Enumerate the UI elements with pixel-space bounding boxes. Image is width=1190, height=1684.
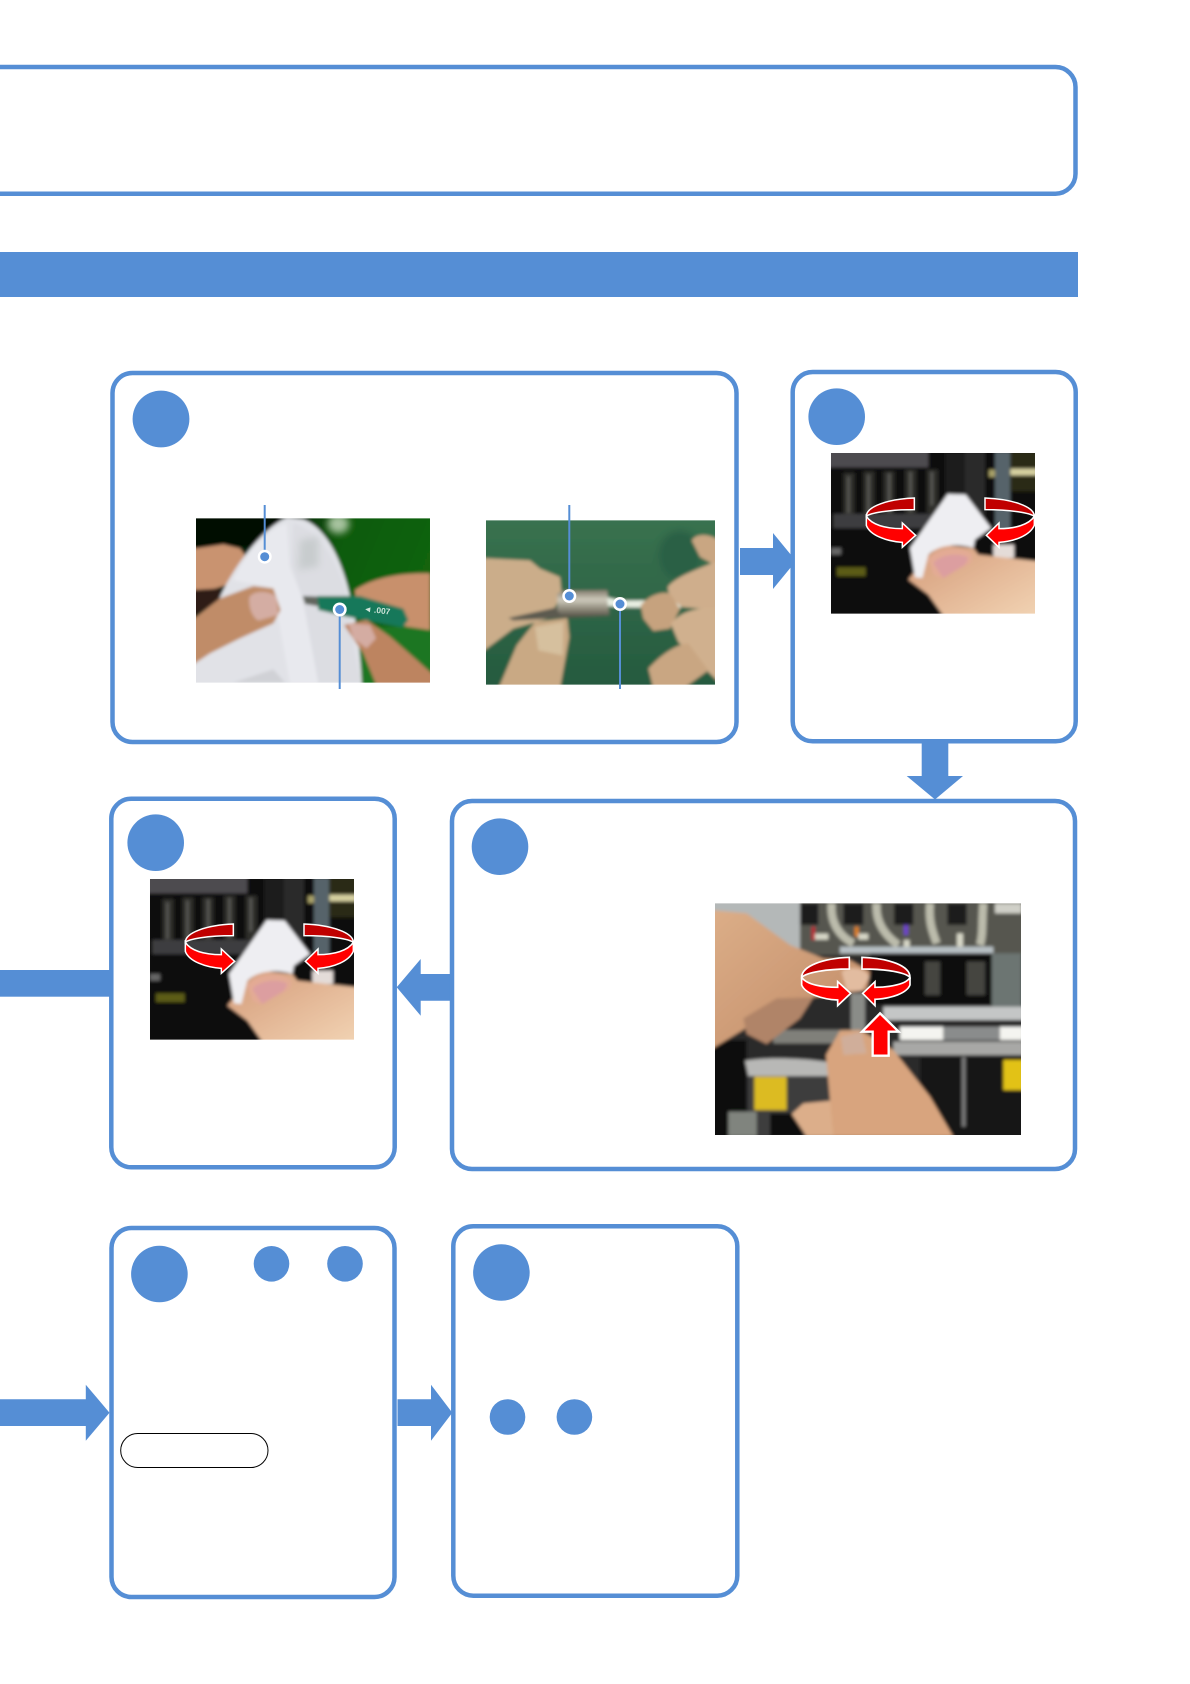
push-up arrow <box>862 1013 899 1056</box>
curl arrow: right <box>985 498 1034 547</box>
callout: tool line and dot <box>333 602 347 689</box>
section heading bar <box>0 252 1078 297</box>
photo: wiping nozzle with cloth <box>831 453 1035 614</box>
step 5 number badge <box>131 1246 188 1302</box>
photo: wiping nozzle with cloth <box>150 879 354 1040</box>
panel: step 1 <box>112 373 736 742</box>
photo: inserting tool into machine <box>710 900 1027 1140</box>
panel: step 3 <box>111 799 395 1167</box>
arrow: into step 5 <box>0 1385 110 1441</box>
panel: step 4 <box>452 801 1075 1169</box>
tool label text: ◄ .007 <box>363 603 391 617</box>
note pill outline <box>121 1434 268 1468</box>
arrow: step 3 to step 4 <box>397 959 452 1016</box>
curl arrow: left <box>185 924 235 973</box>
panel: step 6 <box>453 1226 737 1596</box>
reference badge A <box>254 1246 289 1282</box>
curl arrow: right <box>862 957 910 1006</box>
curl arrow: right <box>304 924 353 973</box>
arrow: step 1 to step 2 <box>740 533 796 589</box>
photo: fitting and rod <box>486 520 715 685</box>
connector bar: left of step 4 <box>0 970 110 997</box>
callout: cloth line and dot <box>258 505 272 564</box>
arrow: step 2 to step 3 <box>907 743 963 800</box>
step 1 number badge <box>133 391 189 447</box>
photo: cloth and tool <box>196 518 430 683</box>
panel: step 2 <box>793 372 1076 741</box>
panel: step 5 <box>112 1228 394 1597</box>
step 6 number badge <box>473 1244 530 1301</box>
callout: rod line and dot <box>613 597 627 689</box>
reference badge B <box>327 1246 363 1282</box>
step 3 number badge <box>127 814 184 871</box>
panel: top empty box <box>0 67 1076 194</box>
callout: fitting line and dot <box>562 505 576 603</box>
curl arrow: left <box>802 957 851 1006</box>
curl arrow: left <box>866 498 916 547</box>
step 2 number badge <box>808 388 865 445</box>
step 4 number badge <box>472 818 528 875</box>
reference badge B <box>557 1399 592 1435</box>
reference badge A <box>490 1399 525 1435</box>
arrow: step 5 to step 6 <box>398 1385 452 1441</box>
